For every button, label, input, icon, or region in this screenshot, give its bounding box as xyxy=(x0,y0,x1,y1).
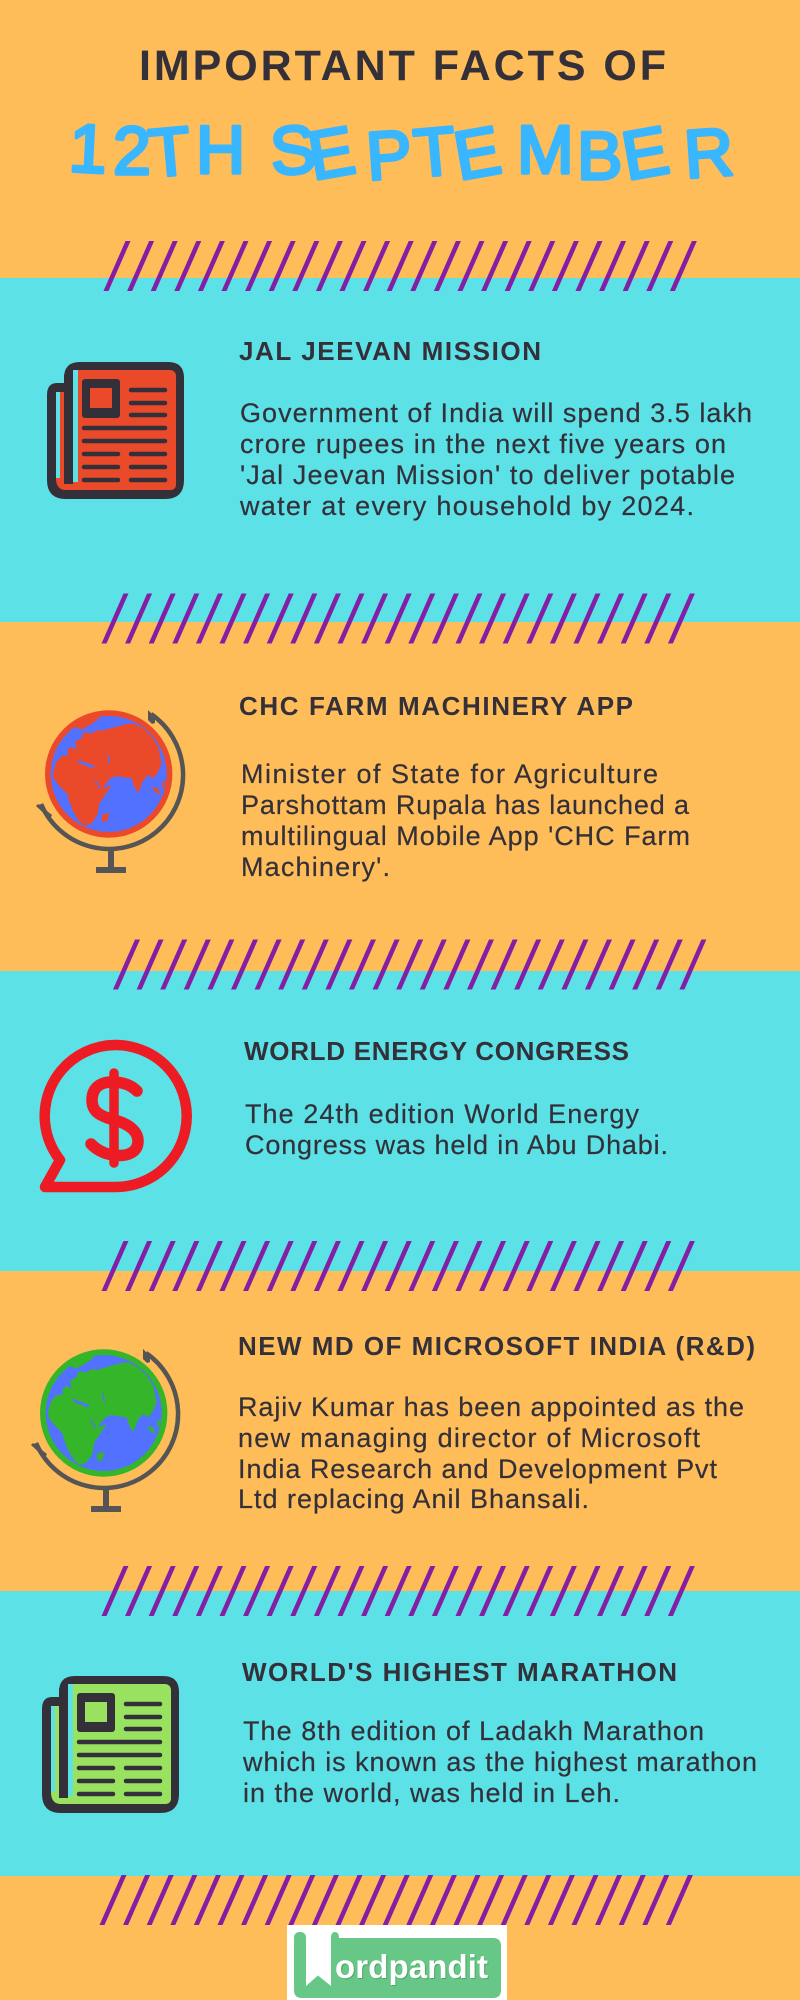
text block: World's Highest Marathon: The 8th edition of Ladakh Marathon xyxy=(243,1716,704,1746)
text block: CHC Farm Machinery App xyxy=(241,759,690,882)
panel: World Energy Congress xyxy=(0,971,800,1271)
text block: CHC Farm Machinery App: Machinery'. xyxy=(241,852,390,882)
text block: CHC Farm Machinery App: multilingual Mobile App 'CHC Farm xyxy=(241,821,690,851)
text block: CHC Farm Machinery App: Parshottam Rupala has launched a xyxy=(241,790,690,820)
heading: Jal Jeevan Mission: JAL JEEVAN MISSION xyxy=(239,336,541,366)
heading: CHC Farm Machinery App: CHC FARM MACHINERY APP xyxy=(239,691,633,721)
text block: New MD of Microsoft India xyxy=(238,1392,744,1514)
text block: New MD of Microsoft India: India Research and Development Pvt xyxy=(238,1454,717,1484)
icon: dollar speech bubble xyxy=(45,1045,187,1187)
text block: New MD of Microsoft India: Rajiv Kumar has been appointed as the xyxy=(238,1392,744,1422)
text block: CHC Farm Machinery App: Minister of State for Agriculture xyxy=(241,759,658,789)
text block: Jal Jeevan Mission: 'Jal Jeevan Mission' to deliver potable xyxy=(240,460,735,490)
logo wordmark: ordpandit xyxy=(335,1948,488,1985)
text block: New MD of Microsoft India: Ltd replacing Anil Bhansali. xyxy=(238,1484,589,1514)
icon: red globe xyxy=(36,710,183,873)
text block: World's Highest Marathon xyxy=(242,1716,757,1808)
logo: Wordpandit xyxy=(287,1925,507,2000)
text block: Jal Jeevan Mission: Government of India will spend 3.5 lakh xyxy=(240,398,752,428)
icon: red newspaper xyxy=(47,362,184,499)
text block: Jal Jeevan Mission xyxy=(239,398,752,521)
icon: green newspaper xyxy=(42,1676,179,1813)
panel: page header xyxy=(0,0,800,278)
panel: footer band xyxy=(0,1876,800,2000)
panel: CHC Farm Machinery App xyxy=(0,622,800,971)
panel: Jal Jeevan Mission xyxy=(0,278,800,622)
text block: World Energy Congress: Congress was held in Abu Dhabi. xyxy=(245,1130,668,1160)
text block: World Energy Congress xyxy=(245,1099,668,1160)
heading: New MD of Microsoft India: NEW MD OF MICROSOFT INDIA (R&D) xyxy=(238,1331,755,1361)
title: 12th September: 12TH SEPTEMBER xyxy=(67,110,736,195)
text block: World Energy Congress: The 24th edition World Energy xyxy=(245,1099,640,1129)
heading: World Energy Congress: WORLD ENERGY CONGRESS xyxy=(244,1036,629,1066)
text block: World's Highest Marathon: which is known as the highest marathon xyxy=(242,1747,757,1777)
title: important facts of: IMPORTANT FACTS OF xyxy=(139,42,666,90)
text block: Jal Jeevan Mission: water at every household by 2024. xyxy=(239,491,694,521)
text block: Jal Jeevan Mission: crore rupees in the next five years on xyxy=(240,429,726,459)
icon: green globe xyxy=(31,1349,178,1512)
heading: World's Highest Marathon: WORLD'S HIGHEST MARATHON xyxy=(242,1657,677,1687)
panel: World's Highest Marathon xyxy=(0,1591,800,1876)
text block: New MD of Microsoft India: new managing director of Microsoft xyxy=(238,1423,700,1453)
panel: New MD of Microsoft India xyxy=(0,1271,800,1591)
text block: World's Highest Marathon: in the world, was held in Leh. xyxy=(243,1778,620,1808)
